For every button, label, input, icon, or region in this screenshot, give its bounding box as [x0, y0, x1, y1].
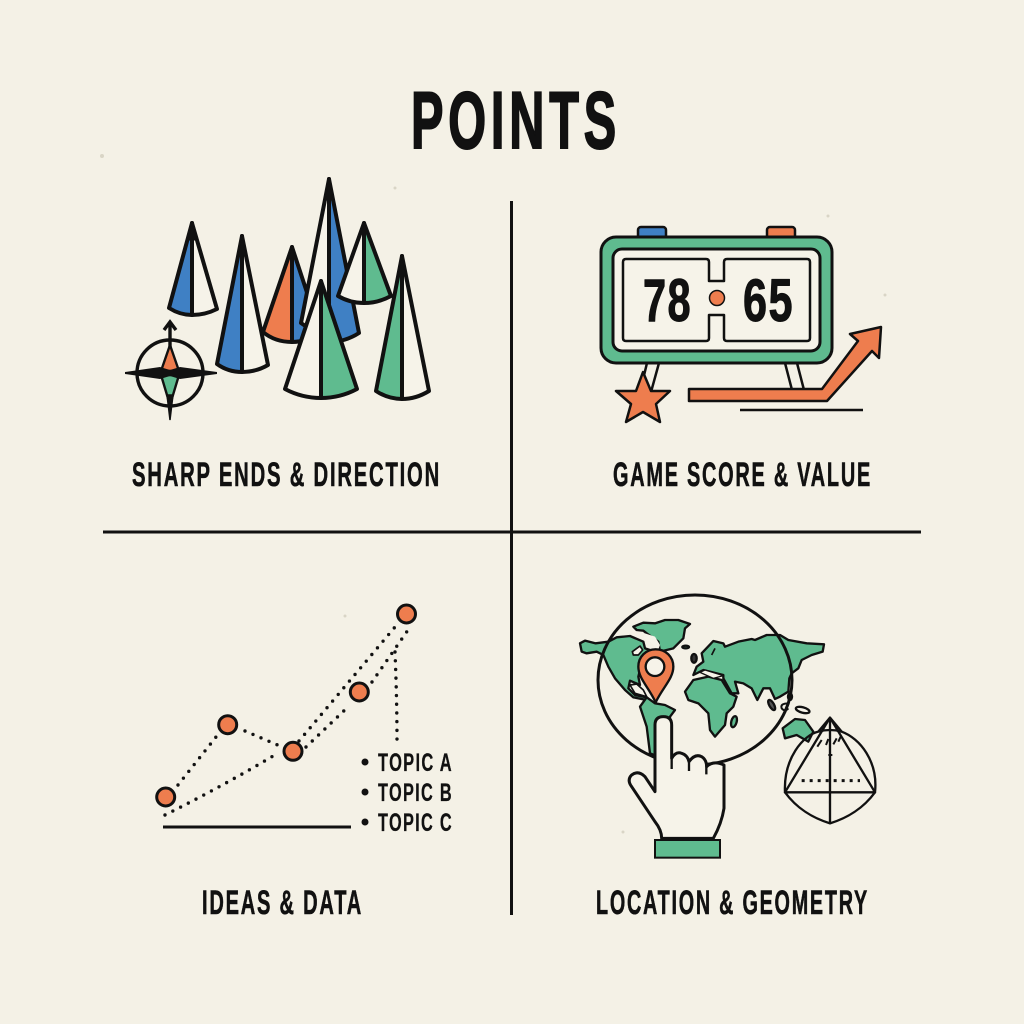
panel: ideas and data: [157, 605, 453, 922]
chart: points: [157, 605, 415, 806]
panel: game score and value: [601, 227, 881, 494]
panel: location and geometry: [580, 595, 875, 922]
list: topics: TOPIC B: [378, 779, 453, 807]
globe outline: [598, 595, 792, 765]
icon: location pin: [638, 649, 673, 702]
chart: dotted connections: [165, 627, 408, 815]
list: topics: TOPIC C: [378, 809, 453, 837]
quadrant dividers: [103, 201, 921, 915]
score digits: [643, 267, 794, 334]
list: topics: [362, 749, 453, 837]
icon: geometric solid: [785, 718, 875, 823]
icon: cones: [169, 179, 429, 399]
icon: globe with continents: [580, 595, 824, 765]
western continents: [580, 620, 690, 757]
eastern continents: [685, 635, 824, 742]
icon: compass: [125, 322, 217, 420]
panel: sharp ends and direction: [125, 179, 441, 494]
score digits: 65: [743, 267, 794, 334]
label: IDEAS & DATA: [202, 884, 363, 922]
label: SHARP ENDS & DIRECTION: [132, 456, 441, 494]
icon: star: [616, 372, 670, 422]
score digits: 78: [643, 267, 692, 334]
icon: pointing hand: [629, 717, 724, 858]
icon: rising arrow: [689, 327, 881, 401]
list: topics: TOPIC A: [378, 749, 453, 777]
icon: scoreboard: [601, 227, 832, 392]
title: POINTS: [411, 76, 621, 166]
